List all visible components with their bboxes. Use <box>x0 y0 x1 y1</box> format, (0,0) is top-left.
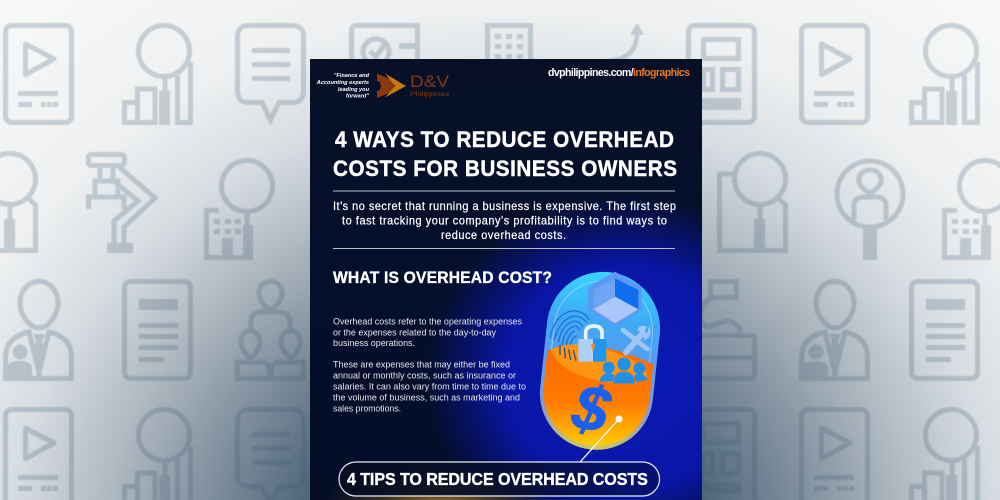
icon: layout sheet <box>688 26 754 122</box>
tagline quote: forward" <box>346 94 369 100</box>
body text: These are expenses that may either be fixed <box>333 360 510 371</box>
icon: magnifier document right <box>720 154 786 251</box>
orange liquid <box>543 344 654 446</box>
icon: dollar sign: $ <box>566 371 616 447</box>
icon: video document lower <box>6 410 72 500</box>
icon: text document right <box>912 282 978 378</box>
intro paragraph: reduce overhead costs. <box>441 230 566 242</box>
logo: D&V Philippines: Philippines <box>410 91 450 98</box>
body text: business operations. <box>333 338 415 349</box>
body text <box>333 316 526 414</box>
icon: magnifier document left <box>0 154 36 251</box>
tagline quote: leading you <box>338 87 370 93</box>
icon: hand on stack <box>691 282 754 378</box>
icon: video document <box>6 26 72 122</box>
tagline quote: "Finance and <box>334 73 370 79</box>
icon: office tower <box>488 26 530 83</box>
heading: what is overhead cost: WHAT IS OVERHEAD COST? <box>333 268 552 287</box>
icon: text document <box>124 282 190 378</box>
fingerprint lower strokes <box>560 345 576 361</box>
logo: D&V Philippines <box>377 72 450 98</box>
icon: layout sheet lower <box>688 410 754 500</box>
icon: magnifier chart lower <box>124 410 190 500</box>
icon: rising arrow <box>608 23 644 61</box>
website url: dvphilippines.com/infographics <box>548 67 690 79</box>
icon: video document right <box>802 26 868 122</box>
icon: hexagon box <box>588 272 642 327</box>
capsule glass shell <box>540 272 660 450</box>
icon: video document lower right <box>802 410 868 500</box>
callout line <box>580 419 619 462</box>
icon: magnifier chart lower right <box>912 410 978 500</box>
icon: wrench and screwdriver <box>623 327 650 352</box>
icon: robot arm <box>88 154 155 253</box>
intro paragraph <box>333 201 676 242</box>
illustration: capsule <box>540 272 660 450</box>
body text: sales promotions. <box>333 403 401 414</box>
intro paragraph: It's no secret that running a business is expensive. The first step <box>333 201 676 213</box>
title: 4 WAYS TO REDUCE OVERHEAD <box>335 127 674 152</box>
title: COSTS FOR BUSINESS OWNERS <box>333 156 677 181</box>
capsule inner ring <box>551 280 653 363</box>
body text: or the expenses related to the day-to-day <box>333 328 496 338</box>
body text: annual or monthly costs, such as insurance or <box>333 371 517 382</box>
icon: speech bubble lower <box>238 410 304 500</box>
icon: magnifier person <box>837 161 903 260</box>
body text: Overhead costs refer to the operating expenses <box>333 316 522 328</box>
icon: magnifier chart right <box>912 26 978 125</box>
tagline quote: Accounting experts <box>316 80 369 86</box>
icon: training group <box>238 282 304 378</box>
icon: businessman right <box>801 282 868 381</box>
logo: D&V Philippines: D&V <box>410 72 450 91</box>
icon: magnifier chart <box>124 26 190 125</box>
body text: the volume of business, such as marketing and <box>333 392 520 403</box>
callout dot <box>615 415 622 422</box>
body text: salaries. It can also vary from time to time due to <box>333 381 526 392</box>
tagline quote <box>316 73 370 100</box>
icon: magnifier building right <box>942 160 1000 260</box>
icon: businessman <box>5 282 72 381</box>
icon: three people <box>599 357 647 384</box>
icon: fingerprint <box>550 311 589 350</box>
panel: infographic preview <box>310 59 702 500</box>
tips badge: 4 TIPS TO REDUCE OVERHEAD COSTS <box>347 469 648 489</box>
liquid surface <box>551 344 647 384</box>
title <box>334 131 676 176</box>
intro paragraph: to fast tracking your company's profitability is to find ways to <box>342 215 667 228</box>
icon: speech bubble <box>238 26 304 120</box>
icon: checklist <box>352 26 420 83</box>
tips badge <box>339 462 660 496</box>
icon: magnifier building <box>204 160 272 260</box>
icon: padlock <box>578 326 606 362</box>
